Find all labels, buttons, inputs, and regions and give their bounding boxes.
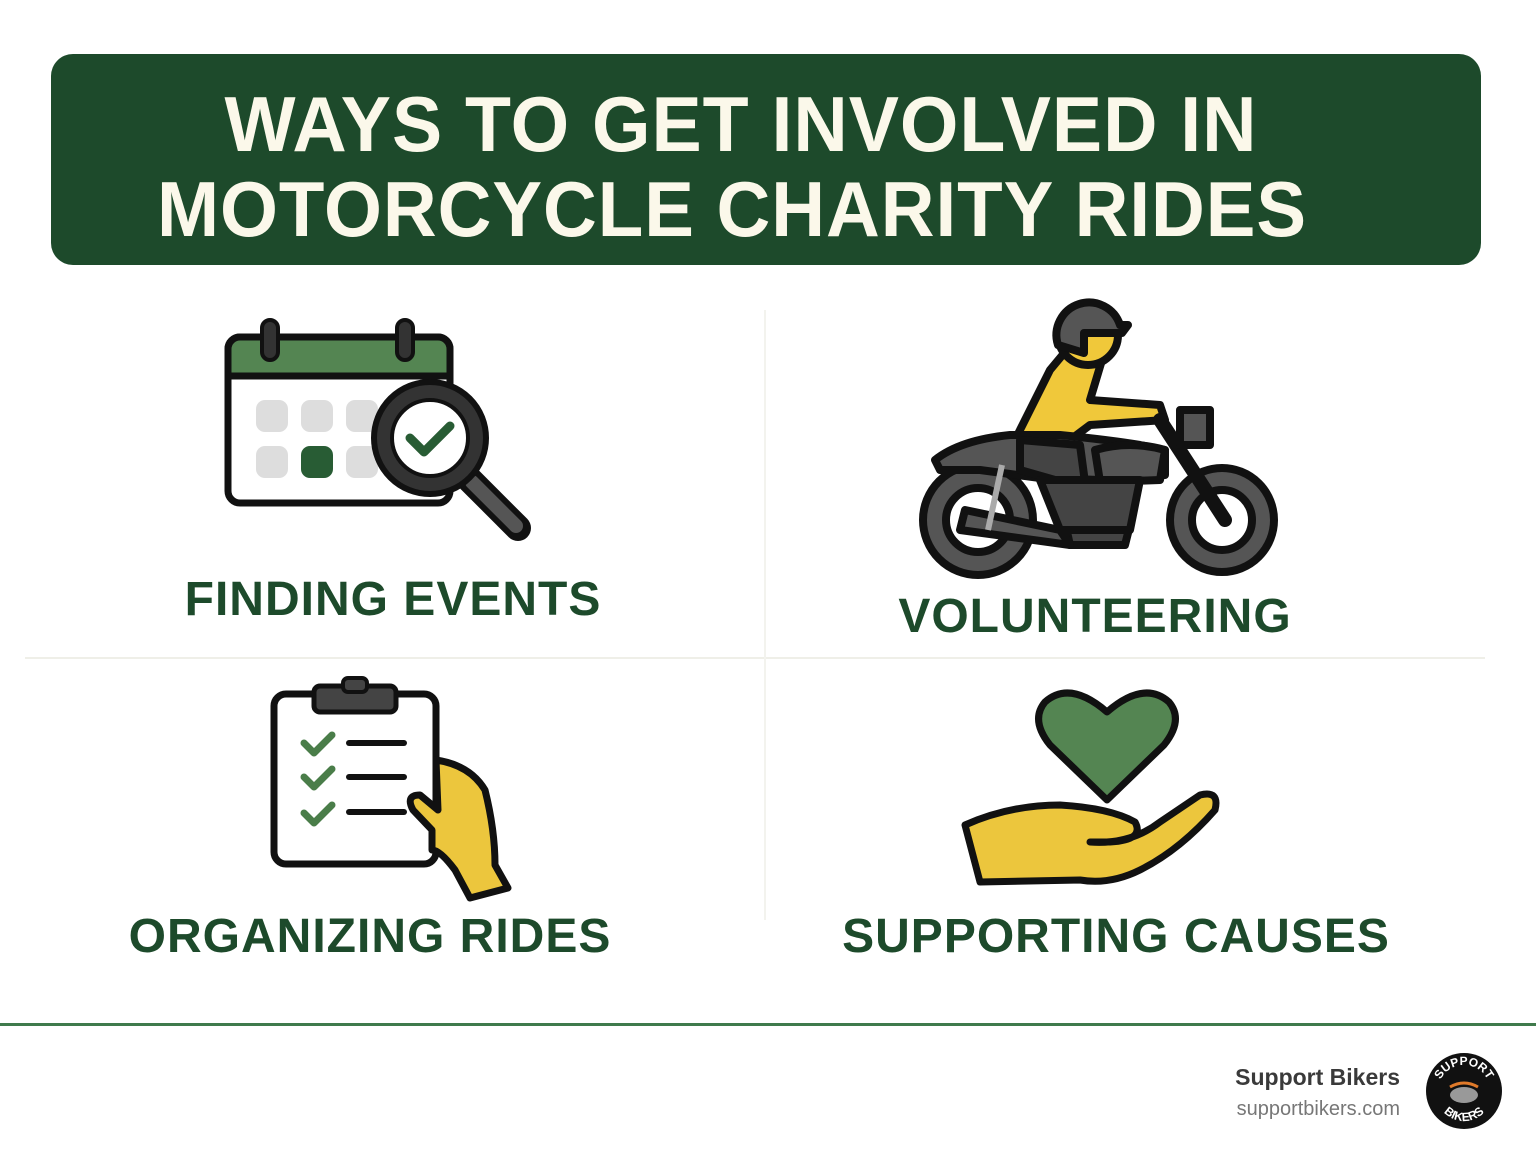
logo: [1426, 1053, 1502, 1129]
title banner: [51, 54, 1481, 265]
title line 1: WAYS TO GET INVOLVED IN: [225, 80, 1257, 168]
label: organizing rides: ORGANIZING RIDES: [129, 910, 611, 963]
label: finding events: FINDING EVENTS: [185, 573, 601, 626]
footer: brand name: Support Bikers: [1235, 1064, 1400, 1090]
icon: calendar with magnifier: [224, 318, 531, 541]
title line 2: MOTORCYCLE CHARITY RIDES: [157, 165, 1307, 253]
icon: heart in hand: [962, 689, 1220, 886]
icon: clipboard with hand: [270, 676, 512, 902]
label: volunteering: VOLUNTEERING: [898, 590, 1292, 643]
footer: url: supportbikers.com: [1237, 1098, 1400, 1120]
logo: SUPPORT: [1434, 1056, 1494, 1078]
label: supporting causes: SUPPORTING CAUSES: [842, 910, 1390, 963]
logo: BIKERS: [1444, 1106, 1484, 1122]
icon: motorcycle rider: [919, 298, 1278, 579]
